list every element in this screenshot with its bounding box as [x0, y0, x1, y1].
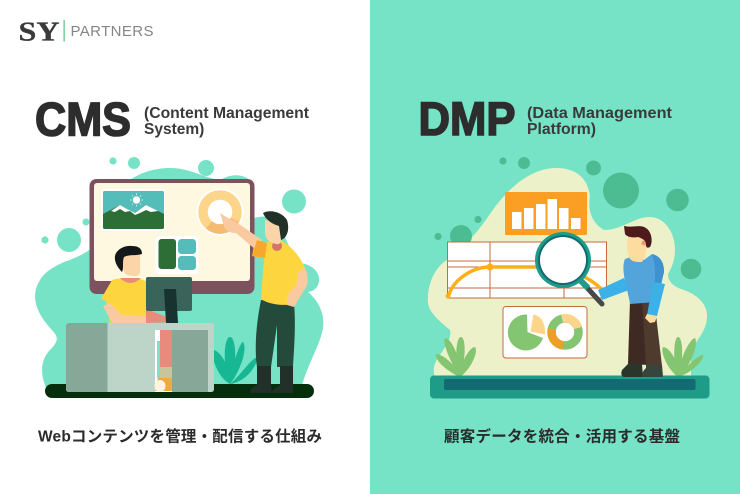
heading: DMP: DMP	[418, 92, 516, 145]
landscape picture	[101, 189, 165, 231]
caption: DMP: 顧客データを統合・活用する基盤	[444, 426, 680, 446]
subheading: Data Management Platform: Platform)	[527, 121, 596, 138]
caption: CMS: Webコンテンツを管理・配信する仕組み	[38, 426, 322, 446]
boots	[250, 366, 272, 393]
person: analyst	[598, 226, 665, 377]
magnifying glass	[535, 232, 602, 304]
donut chart	[552, 318, 578, 346]
layout blocks	[156, 236, 198, 274]
hair	[624, 226, 652, 248]
illustration: CMS team at monitor	[35, 157, 323, 398]
shirt	[623, 254, 664, 304]
panel: CMS	[35, 92, 323, 446]
logo: SY Partners	[18, 16, 154, 46]
pie chart	[508, 314, 546, 350]
desk	[66, 323, 214, 392]
plant: left	[436, 337, 476, 377]
resting arm	[287, 268, 308, 307]
decorative bubbles	[434, 157, 701, 279]
base shadow	[45, 384, 314, 398]
computer monitor	[146, 277, 192, 323]
person: seated woman at desk	[101, 246, 180, 324]
person: pointing man	[220, 211, 308, 393]
pointing arm	[220, 213, 262, 250]
plant: right	[662, 337, 703, 377]
background blob	[35, 168, 323, 392]
hanging arm	[647, 282, 665, 316]
panel: DMP	[418, 92, 710, 446]
data table with trend line	[446, 242, 606, 298]
plant	[213, 337, 257, 384]
shirt	[101, 278, 146, 323]
subheading: Content Management System: System)	[144, 121, 204, 138]
hair	[263, 211, 288, 240]
subheading: Content Management System: (Content Management	[144, 105, 309, 122]
donut chart	[196, 188, 244, 236]
platform	[430, 376, 710, 398]
head	[265, 220, 282, 244]
shoes	[621, 364, 643, 377]
hand	[645, 314, 657, 323]
logo: SY Partners: PARTNERS	[70, 23, 154, 40]
heading: CMS: CMS	[35, 92, 131, 146]
illustration: DMP analyst with magnifier	[428, 157, 710, 398]
shirt	[252, 239, 305, 305]
pie and donut chart panel	[503, 306, 587, 358]
trousers	[628, 300, 652, 365]
display board	[90, 179, 254, 294]
bar chart panel	[505, 192, 587, 235]
logo: SY Partners: SY	[18, 16, 60, 46]
head	[627, 236, 647, 262]
arm	[103, 303, 150, 324]
subheading: Data Management Platform: (Data Management	[527, 105, 672, 122]
background blob	[428, 168, 707, 392]
pointing arm	[598, 278, 629, 300]
head	[122, 254, 140, 276]
trousers	[256, 300, 295, 367]
decorative bubbles	[41, 157, 306, 252]
hair	[115, 246, 142, 272]
